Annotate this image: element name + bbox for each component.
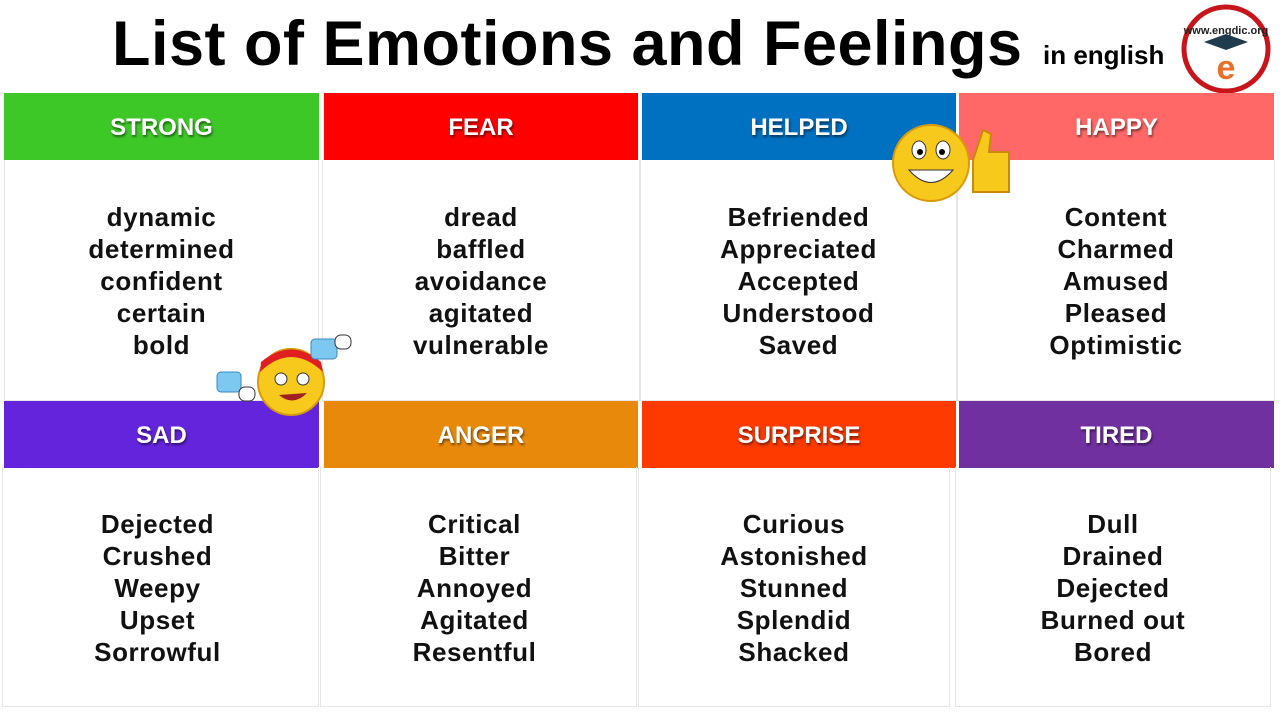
text: vulnerable bbox=[413, 330, 549, 360]
panel: surprise bbox=[638, 401, 956, 707]
text: baffled bbox=[436, 234, 526, 264]
subtitle: in english bbox=[1043, 40, 1164, 70]
text: Curious bbox=[743, 509, 845, 539]
text: SAD bbox=[136, 422, 187, 449]
panel: happy bbox=[957, 93, 1275, 401]
logo: e bbox=[1217, 49, 1235, 87]
logo bbox=[1182, 4, 1270, 93]
text: Drained bbox=[1062, 541, 1164, 571]
text: STRONG bbox=[110, 114, 213, 141]
text: Splendid bbox=[737, 605, 851, 635]
title: List of Emotions and Feelings bbox=[112, 9, 1023, 79]
text: dread bbox=[444, 202, 518, 232]
text: Befriended bbox=[728, 202, 869, 232]
text: Critical bbox=[428, 509, 521, 539]
text: dynamic bbox=[107, 202, 216, 232]
text: Charmed bbox=[1058, 234, 1174, 264]
text: Content bbox=[1065, 202, 1167, 232]
text: ANGER bbox=[438, 422, 524, 449]
text: Weepy bbox=[114, 573, 201, 603]
text: FEAR bbox=[448, 114, 514, 141]
text: Dejected bbox=[1056, 573, 1170, 603]
text: HAPPY bbox=[1075, 114, 1158, 141]
icon: thumbs up emoji bbox=[892, 124, 1010, 202]
text: bold bbox=[133, 330, 190, 360]
text: Shacked bbox=[738, 637, 850, 667]
text: Crushed bbox=[103, 541, 212, 571]
logo: www.engdic.org bbox=[1183, 25, 1268, 37]
text: Agitated bbox=[420, 605, 529, 635]
text: Amused bbox=[1063, 266, 1169, 296]
text: Dull bbox=[1087, 509, 1139, 539]
text: TIRED bbox=[1080, 422, 1152, 449]
text: Sorrowful bbox=[94, 637, 221, 667]
text: Dejected bbox=[101, 509, 214, 539]
text: agitated bbox=[429, 298, 533, 328]
text: Appreciated bbox=[720, 234, 877, 264]
panel: tired bbox=[955, 401, 1274, 707]
text: avoidance bbox=[415, 266, 547, 296]
text: Pleased bbox=[1065, 298, 1167, 328]
text: Bitter bbox=[439, 541, 510, 571]
text: Bored bbox=[1074, 637, 1152, 667]
text: confident bbox=[100, 266, 223, 296]
text: Accepted bbox=[738, 266, 859, 296]
text: Annoyed bbox=[417, 573, 532, 603]
text: SURPRISE bbox=[738, 422, 860, 449]
panel: fear bbox=[322, 93, 640, 401]
text: Optimistic bbox=[1049, 330, 1183, 360]
text: Stunned bbox=[740, 573, 848, 603]
text: certain bbox=[117, 298, 206, 328]
text: determined bbox=[88, 234, 235, 264]
text: Understood bbox=[723, 298, 874, 328]
text: Astonished bbox=[720, 541, 868, 571]
panel: sad bbox=[2, 401, 319, 707]
text: Saved bbox=[759, 330, 838, 360]
text: Burned out bbox=[1041, 605, 1185, 635]
text: Resentful bbox=[413, 637, 536, 667]
panel: strong bbox=[4, 93, 319, 401]
panel: helped bbox=[640, 93, 957, 401]
panel: anger bbox=[320, 401, 638, 707]
text: Upset bbox=[120, 605, 195, 635]
text: HELPED bbox=[750, 114, 848, 141]
icon: workout emoji bbox=[216, 334, 352, 416]
